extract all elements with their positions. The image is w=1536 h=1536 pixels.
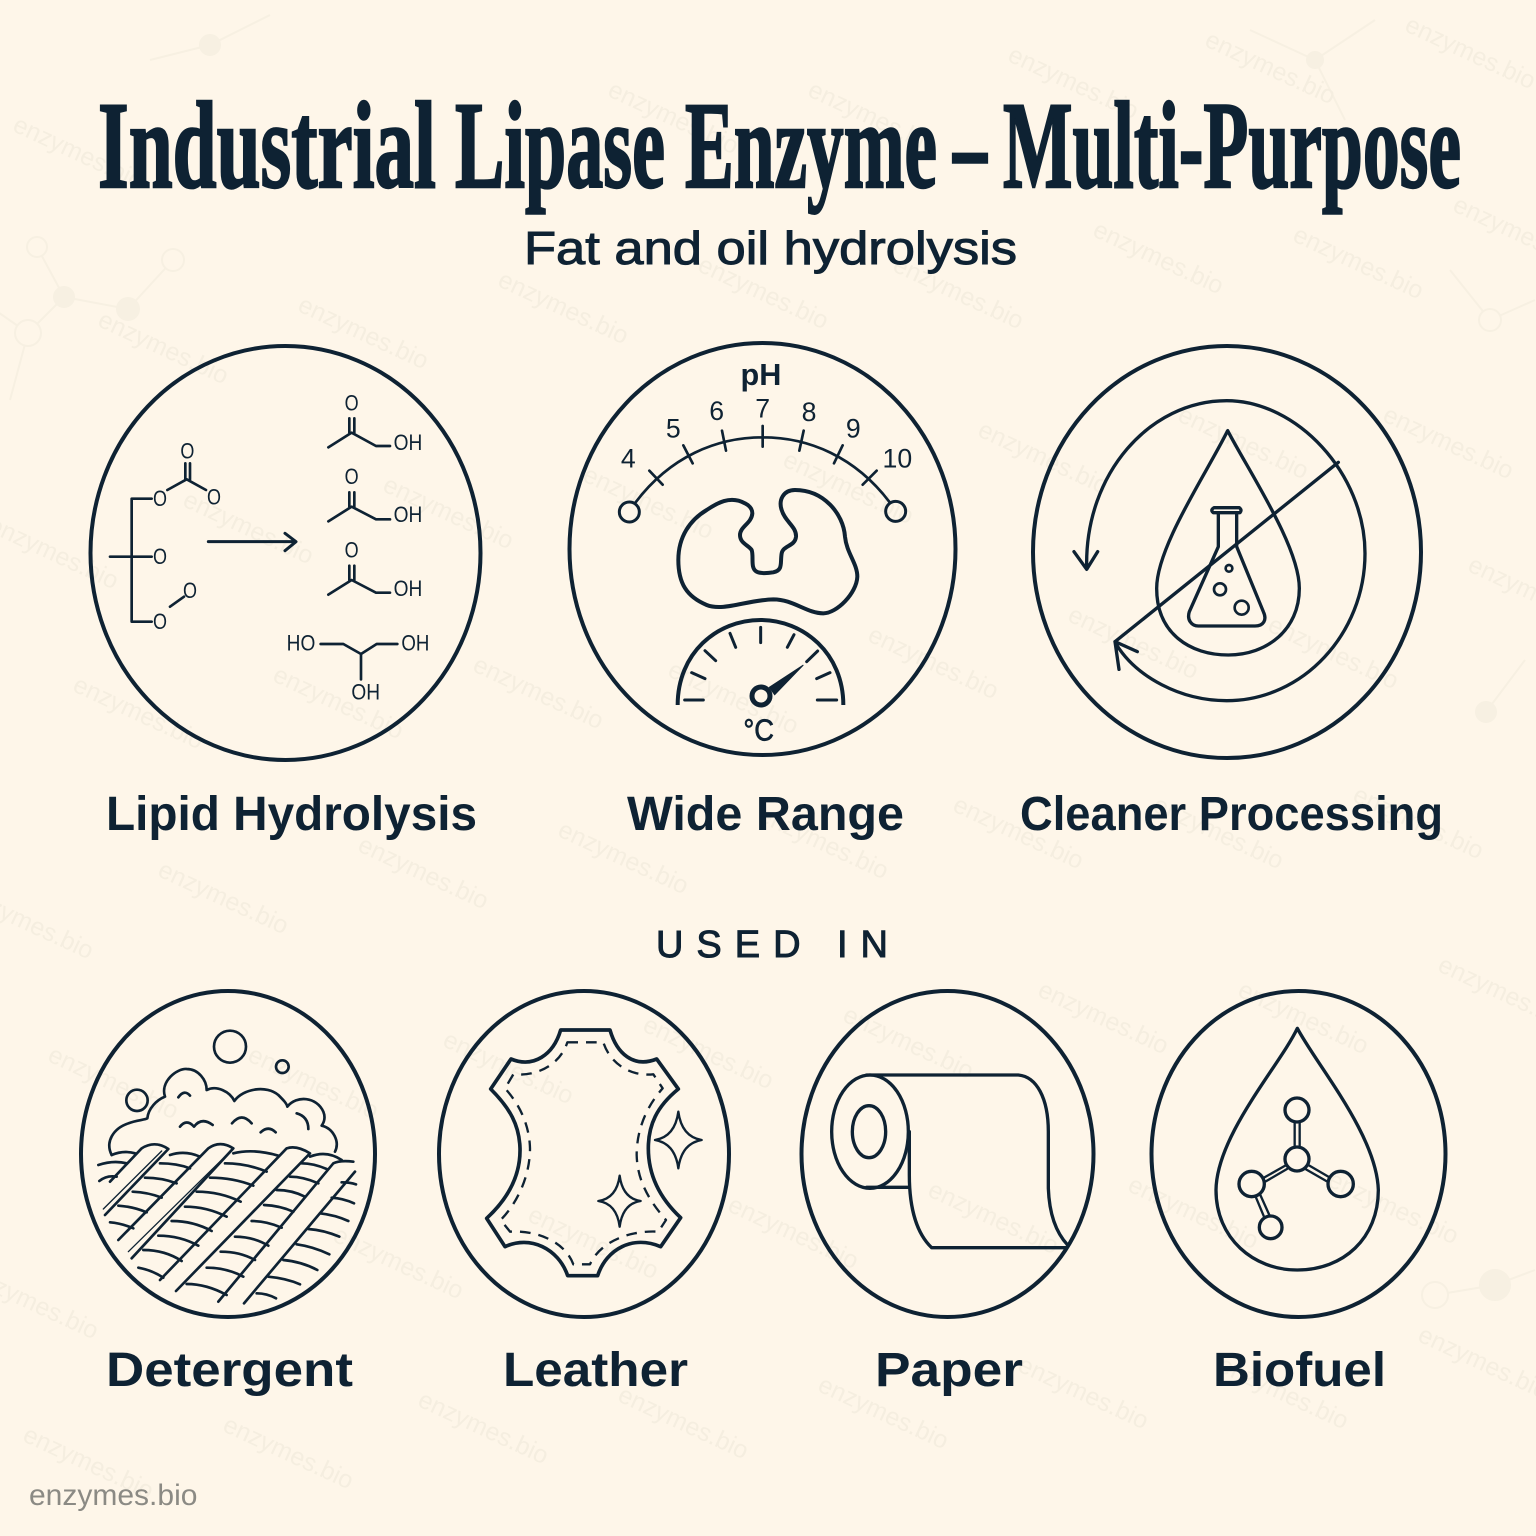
label: biofuel: Biofuel: [1213, 1344, 1386, 1397]
icon: pH scale: 4: [621, 443, 636, 473]
label: leather: Leather: [503, 1344, 688, 1397]
text: enzymes.bio: [839, 1000, 978, 1085]
footer brand: enzymes.bio: [29, 1479, 197, 1512]
icon: triglyceride structure: O: [180, 438, 194, 463]
text: enzymes.bio: [329, 1220, 468, 1305]
icon: foam and bubbles: [109, 1031, 337, 1155]
text: enzymes.bio: [94, 305, 233, 390]
icon: glycerol: OH: [351, 679, 380, 704]
icon: fatty acid products: O: [345, 391, 359, 416]
text: enzymes.bio: [469, 650, 608, 735]
text: enzymes.bio: [244, 1040, 383, 1125]
icon: glycerol: [287, 631, 429, 704]
text: enzymes.bio: [179, 485, 318, 570]
text: enzymes.bio: [294, 290, 433, 375]
text: enzymes.bio: [69, 670, 208, 755]
icon: pH scale: pH: [741, 358, 781, 392]
arrow: reaction: [208, 533, 296, 551]
text: enzymes.bio: [524, 1200, 663, 1285]
text: enzymes.bio: [1034, 975, 1173, 1060]
label: lipid hydrolysis: Lipid Hydrolysis: [106, 788, 477, 841]
label: paper: Paper: [875, 1344, 1023, 1397]
text: enzymes.bio: [1124, 1170, 1263, 1255]
text: enzymes.bio: [154, 855, 293, 940]
icon: triglyceride structure: O: [153, 486, 167, 511]
title: [98, 77, 1461, 214]
panel: cleaner processing icon: [1033, 346, 1421, 758]
icon: triglyceride structure: [110, 438, 221, 634]
icon: pH scale: [619, 358, 912, 522]
text: enzymes.bio: [639, 1010, 778, 1095]
icon: sparkles: [598, 1112, 702, 1227]
text: enzymes.bio: [219, 1410, 358, 1495]
text: enzymes.bio: [414, 1385, 553, 1470]
icon: paper roll: [832, 1075, 1068, 1248]
text: enzymes.bio: [604, 75, 743, 160]
icon: leather hide: [487, 1030, 681, 1276]
icon: fatty acid products: [328, 391, 422, 601]
icon: pH scale: 5: [666, 413, 681, 443]
label: wide range: Wide Range: [627, 788, 904, 841]
text: enzymes.bio: [974, 415, 1113, 500]
icon: triglyceride structure: O: [153, 609, 167, 634]
icon: temperature gauge: °C: [743, 714, 774, 748]
text: enzymes.bio: [1289, 220, 1428, 305]
icon: fatty acid products: OH: [394, 576, 422, 601]
text: enzymes.bio: [804, 75, 943, 160]
icon: recycle arrows: [1074, 401, 1365, 701]
icon: stitching: [501, 1042, 666, 1264]
text: enzymes.bio: [664, 655, 803, 740]
text: enzymes.bio: [354, 830, 493, 915]
text: enzymes.bio: [439, 1025, 578, 1110]
text: enzymes.bio: [1379, 400, 1518, 485]
text: enzymes.bio: [1349, 780, 1488, 865]
icon: glycerol: OH: [401, 631, 429, 656]
text: enzymes.bio: [779, 445, 918, 530]
text: enzymes.bio: [554, 815, 693, 900]
icon: pH scale: 10: [883, 443, 912, 473]
text: enzymes.bio: [1064, 600, 1203, 685]
text: enzymes.bio: [1214, 1350, 1353, 1435]
panel: leather icon: [439, 991, 729, 1317]
icon: triglyceride structure: O: [207, 485, 221, 510]
text: enzymes.bio: [19, 1420, 158, 1505]
title: Industrial: [98, 77, 436, 214]
text: enzymes.bio: [494, 265, 633, 350]
text: enzymes.bio: [949, 790, 1088, 875]
panel: lipid hydrolysis icon: [90, 346, 480, 760]
icon: fatty acid products: OH: [394, 502, 422, 527]
icon: pH scale: 7: [755, 393, 770, 423]
section heading: used in: USED IN: [656, 924, 888, 966]
panel: paper icon: [802, 991, 1094, 1317]
icon: fatty acid products: OH: [394, 430, 422, 455]
text: enzymes.bio: [1004, 40, 1143, 125]
icon: fuel drop: [1216, 1028, 1378, 1270]
text: enzymes.bio: [754, 800, 893, 885]
text: enzymes.bio: [1401, 10, 1536, 95]
icon: molecule: [1239, 1098, 1353, 1239]
panel: detergent icon: [81, 991, 375, 1317]
icon: triglyceride structure: O: [153, 544, 167, 569]
text: enzymes.bio: [1201, 25, 1340, 110]
text: enzymes.bio: [269, 660, 408, 745]
panel: wide range icon: [570, 343, 956, 755]
title: Enzyme: [685, 77, 937, 214]
panel: biofuel icon: [1152, 991, 1446, 1317]
icon: enzyme shape: [678, 490, 857, 613]
text: enzymes.bio: [1014, 1350, 1153, 1435]
icon: fatty acid products: O: [345, 537, 359, 562]
icon: glycerol: HO: [287, 631, 315, 656]
icon: pH scale: 6: [709, 396, 724, 426]
label: cleaner processing: Cleaner Processing: [1020, 788, 1443, 841]
text: enzymes.bio: [814, 1370, 953, 1455]
icon: oil drop: [1157, 431, 1299, 655]
icon: pH scale: 9: [846, 413, 861, 443]
title: –: [952, 77, 988, 214]
text: enzymes.bio: [1264, 610, 1403, 695]
text: enzymes.bio: [579, 460, 718, 545]
icon: pH scale: 8: [802, 397, 816, 427]
text: enzymes.bio: [1234, 975, 1373, 1060]
text: enzymes.bio: [864, 620, 1003, 705]
text: enzymes.bio: [1089, 215, 1228, 300]
icon: triglyceride structure: O: [183, 578, 197, 603]
text: enzymes.bio: [614, 1380, 753, 1465]
text: enzymes.bio: [1149, 790, 1288, 875]
text: enzymes.bio: [889, 250, 1028, 335]
text: enzymes.bio: [1174, 400, 1313, 485]
text: enzymes.bio: [379, 470, 518, 555]
icon: temperature gauge: [678, 620, 843, 748]
label: detergent: Detergent: [106, 1344, 353, 1397]
title: Lipase: [455, 77, 665, 214]
subtitle: Fat and oil hydrolysis: [524, 222, 1017, 274]
text: enzymes.bio: [1324, 1165, 1463, 1250]
icon: fatty acid products: O: [345, 464, 359, 489]
text: enzymes.bio: [724, 1190, 863, 1275]
icon: fabric folds: [98, 1144, 356, 1303]
text: enzymes.bio: [9, 110, 148, 195]
text: enzymes.bio: [924, 1175, 1063, 1260]
text: enzymes.bio: [694, 250, 833, 335]
icon: flask: [1189, 508, 1265, 626]
text: enzymes.bio: [44, 1040, 183, 1125]
